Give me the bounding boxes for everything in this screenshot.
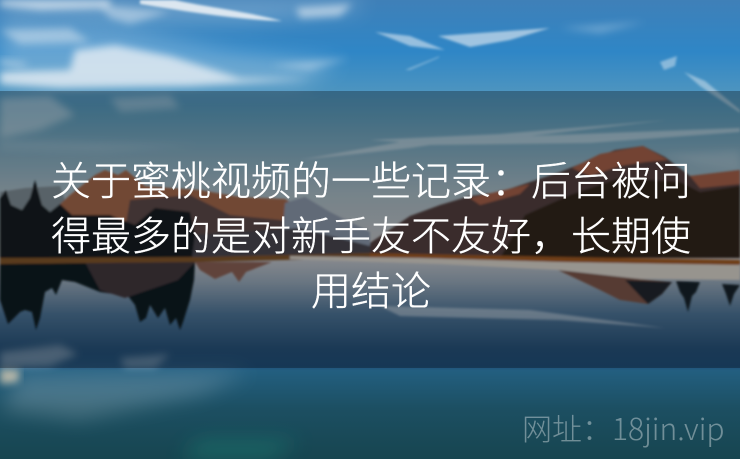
reflected mountain right — [558, 270, 672, 304]
reflected mountain left — [195, 262, 272, 282]
lake water — [0, 258, 740, 459]
dark lower slope centre — [190, 228, 370, 258]
reflected trees right — [676, 281, 740, 312]
foreground trees left — [0, 180, 195, 258]
orange mountain left — [48, 170, 310, 258]
blue-grey mountain left — [280, 197, 370, 258]
mountain right — [370, 146, 740, 258]
mountain right forest — [500, 178, 740, 258]
mountain left shaded face — [120, 195, 310, 258]
title: 关于蜜桃视频的一些记录：后台被问得最多的是对新手友不友好，长期使用结论 — [51, 149, 691, 317]
distant grey ridge left — [0, 186, 70, 258]
shoreline right — [370, 253, 740, 268]
watermark: 网址：18jin.vip — [522, 405, 725, 449]
shoreline left — [0, 253, 370, 264]
landscape — [0, 146, 740, 330]
snow bank — [290, 256, 740, 280]
dark overlay band — [0, 91, 740, 368]
mountain right sunlit — [470, 146, 740, 205]
reflected trees left — [0, 262, 195, 330]
reflected mountain right shadow — [625, 280, 672, 304]
sky — [0, 0, 740, 258]
reflected mountain left dark — [85, 262, 195, 298]
